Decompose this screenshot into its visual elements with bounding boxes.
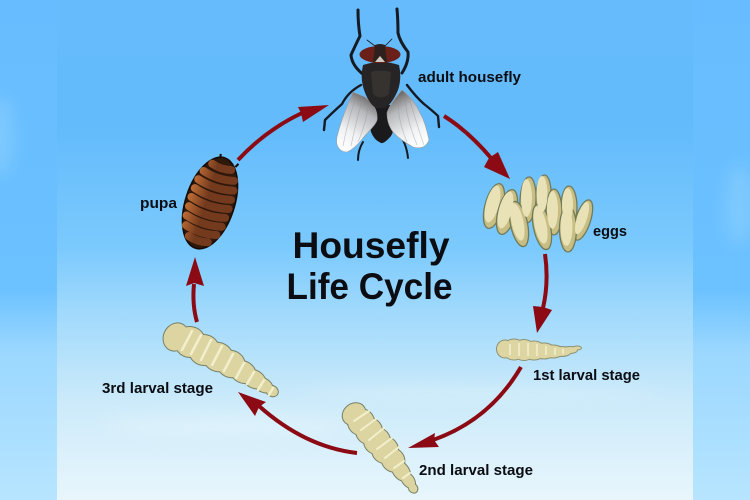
fly wings [337, 92, 377, 152]
label: pupa: pupa [140, 195, 178, 212]
label: eggs: eggs [593, 223, 627, 240]
fly wing veins [343, 96, 424, 146]
icon: 3rd larval stage [157, 318, 281, 400]
arrow: adult to eggs [444, 116, 510, 179]
arrow: 3rd larval stage to pupa [186, 257, 204, 322]
title [286, 225, 452, 307]
arrow: 1st to 2nd larval stage [408, 367, 521, 448]
label: adult housefly: adult housefly [418, 69, 522, 86]
icon: pupa [172, 148, 249, 256]
icon: 2nd larval stage [337, 397, 421, 496]
title: Life Cycle [286, 266, 452, 307]
icon: eggs [479, 175, 597, 252]
fly thorax [362, 62, 400, 108]
icon: adult housefly [324, 9, 439, 160]
egg highlights [481, 176, 592, 246]
fly head [360, 46, 400, 63]
arrow: 2nd to 3rd larval stage [238, 392, 357, 453]
arrow: pupa to adult [238, 105, 329, 160]
icon: 1st larval stage [496, 338, 582, 361]
label: 2nd larval stage: 2nd larval stage [419, 462, 533, 479]
title: Housefly [292, 225, 450, 266]
arrow: eggs to 1st larval stage [533, 254, 552, 333]
fly abdomen [370, 105, 395, 143]
label: 1st larval stage: 1st larval stage [533, 367, 640, 384]
fly legs [324, 9, 439, 160]
label: 3rd larval stage: 3rd larval stage [102, 380, 213, 397]
